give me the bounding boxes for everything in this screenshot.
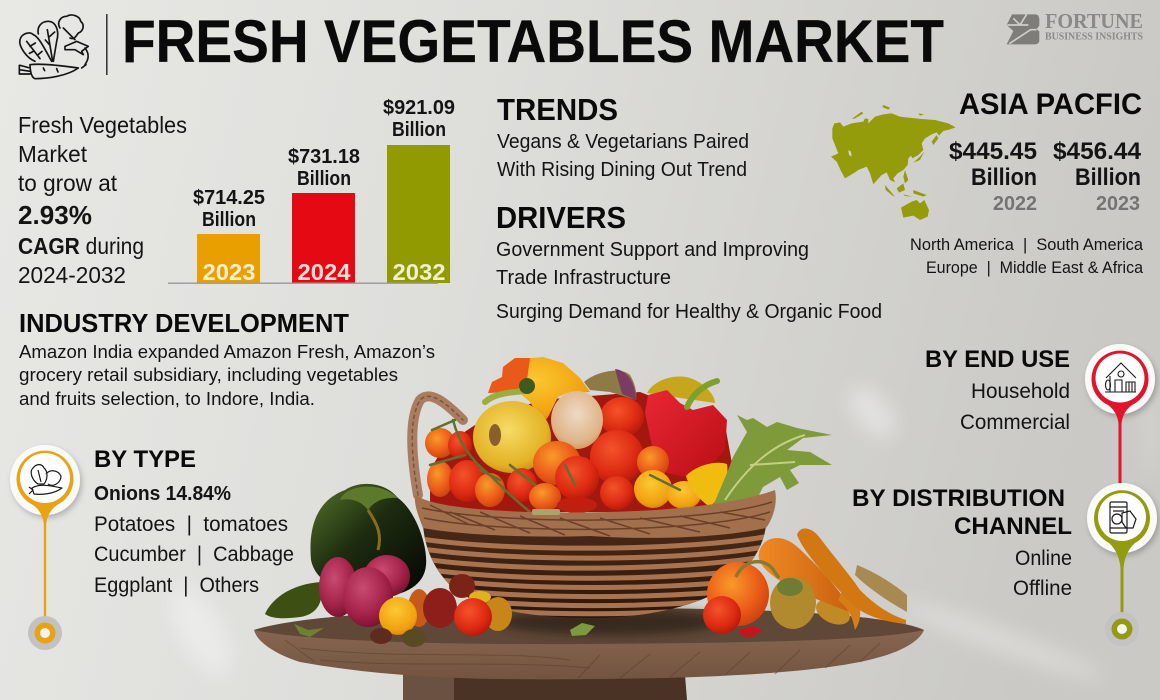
illustration: vegetable basket on table bbox=[254, 357, 924, 700]
stat: 2022 value bbox=[949, 138, 1037, 215]
by distribution channel text bbox=[852, 485, 1072, 600]
pin: by end use bbox=[1085, 344, 1155, 484]
produce backing bbox=[430, 392, 735, 512]
bar 2023: $714.25 bbox=[193, 187, 265, 209]
regional map: Asia Pacific bbox=[831, 105, 956, 220]
back yellow pepper bbox=[647, 376, 715, 403]
bar 2023 bbox=[193, 187, 265, 285]
table bbox=[254, 608, 924, 700]
vine end bbox=[532, 509, 560, 515]
trends: TRENDS bbox=[497, 92, 618, 127]
trends: With Rising Dining Out Trend bbox=[497, 158, 747, 181]
vine bbox=[430, 420, 680, 512]
text: market growth summary bbox=[18, 112, 187, 288]
title: FRESH VEGETABLES MARKET bbox=[122, 8, 944, 75]
icon: house bbox=[1105, 363, 1136, 392]
yellow pepper bbox=[686, 463, 727, 507]
industry development: grocery retail subsidiary, including vegetables bbox=[19, 364, 398, 385]
bar 2024: 2024 bbox=[298, 259, 351, 285]
centre leaf bbox=[570, 623, 595, 636]
yellow onion bbox=[473, 401, 551, 473]
text: market growth summary: Fresh Vegetables bbox=[18, 112, 187, 138]
foreground left produce bbox=[319, 555, 512, 647]
by end use text: Household bbox=[971, 380, 1070, 403]
trends bbox=[497, 92, 749, 181]
eggplant bbox=[584, 369, 636, 400]
by type text bbox=[94, 446, 294, 597]
lettuce bbox=[713, 415, 832, 506]
industry development bbox=[19, 308, 435, 409]
basket rim bbox=[415, 490, 776, 538]
header divider bbox=[106, 14, 108, 75]
text: market growth summary: Market bbox=[18, 141, 88, 167]
upper tomato bbox=[600, 397, 644, 437]
bar chart: market size bbox=[168, 97, 455, 285]
by end use text: Commercial bbox=[960, 411, 1070, 434]
logo: Fortune Business Insights: FORTUNE bbox=[1045, 9, 1143, 33]
stat: 2022 value: Billion bbox=[971, 164, 1037, 191]
tan vegetables bbox=[855, 565, 907, 612]
stat: 2023 value: Billion bbox=[1075, 164, 1141, 191]
text: market growth summary: 2024-2032 bbox=[18, 262, 126, 288]
pin: by type bbox=[10, 445, 80, 650]
icon: vegetables bbox=[29, 465, 62, 494]
bar 2023: 2023 bbox=[202, 259, 256, 285]
text: market growth summary: 2.93% bbox=[18, 200, 92, 230]
right pepper and fruit bbox=[703, 562, 816, 637]
white onion bbox=[551, 391, 603, 449]
by type text: Cucumber | Cabbage bbox=[94, 543, 294, 566]
by end use text bbox=[925, 346, 1070, 434]
bar 2024: Billion bbox=[297, 168, 351, 190]
icon: phone and hand bbox=[1110, 502, 1136, 533]
pin: by distribution channel bbox=[1087, 483, 1157, 646]
bar 2024: $731.18 bbox=[288, 146, 360, 168]
trends: Vegans & Vegetarians Paired bbox=[497, 130, 749, 153]
by distribution channel text: Offline bbox=[1013, 577, 1072, 600]
other regions: Europe | Middle East & Africa bbox=[926, 258, 1144, 277]
stat: 2022 value: 2022 bbox=[993, 192, 1037, 215]
drivers: Government Support and Improving bbox=[496, 238, 809, 261]
icon: vegetables header bbox=[19, 15, 88, 79]
drivers bbox=[496, 200, 882, 323]
drivers: Surging Demand for Healthy & Organic Food bbox=[496, 300, 882, 323]
bar 2032: 2032 bbox=[392, 259, 446, 285]
red pepper bbox=[645, 381, 727, 477]
bar 2032: $921.09 bbox=[383, 97, 455, 119]
by type text: Eggplant | Others bbox=[94, 574, 259, 597]
cluster tomatoes bbox=[425, 428, 701, 513]
logo: Fortune Business Insights: BUSINESS INSIGHTS bbox=[1045, 32, 1143, 42]
bar 2024 bbox=[288, 146, 360, 285]
carrots bbox=[759, 529, 906, 630]
industry development: Amazon India expanded Amazon Fresh, Amazon’s bbox=[19, 341, 435, 362]
by type text: BY TYPE bbox=[94, 446, 196, 473]
onion root bbox=[489, 424, 501, 446]
stat: 2023 value: $456.44 bbox=[1053, 138, 1141, 165]
dark squash bbox=[310, 484, 426, 597]
bar 2032 bbox=[383, 97, 455, 285]
drivers: Trade Infrastructure bbox=[496, 266, 671, 289]
basket body bbox=[415, 525, 775, 618]
orange pepper bbox=[485, 357, 590, 423]
stat: 2023 value: 2023 bbox=[1096, 192, 1140, 215]
other regions: North America | South America bbox=[910, 235, 1144, 254]
by type text: Onions 14.84% bbox=[94, 483, 231, 505]
stat: 2023 value bbox=[1053, 138, 1141, 215]
industry development: and fruits selection, to Indore, India. bbox=[19, 388, 315, 409]
foreground leaf bbox=[294, 624, 324, 637]
stat: 2022 value: $445.45 bbox=[949, 138, 1037, 165]
heading: Asia Pacific: ASIA PACFIC bbox=[959, 88, 1142, 121]
text: market growth summary: to grow at bbox=[18, 170, 118, 196]
other regions bbox=[910, 235, 1144, 277]
drivers: DRIVERS bbox=[496, 200, 626, 235]
by type text: Potatoes | tomatoes bbox=[94, 513, 288, 536]
text: market growth summary: CAGR during bbox=[18, 233, 144, 259]
bar 2032: Billion bbox=[392, 119, 446, 141]
produce in basket bbox=[425, 357, 832, 513]
by end use text: BY END USE bbox=[925, 346, 1070, 373]
by distribution channel text: CHANNEL bbox=[954, 513, 1072, 540]
logo: Fortune Business Insights bbox=[1007, 9, 1143, 44]
by distribution channel text: Online bbox=[1015, 547, 1072, 570]
basket handle bbox=[412, 396, 463, 495]
by distribution channel text: BY DISTRIBUTION bbox=[852, 485, 1065, 512]
bar 2023: Billion bbox=[202, 209, 256, 231]
industry development: INDUSTRY DEVELOPMENT bbox=[19, 308, 349, 338]
small green vegetable bbox=[265, 582, 322, 618]
